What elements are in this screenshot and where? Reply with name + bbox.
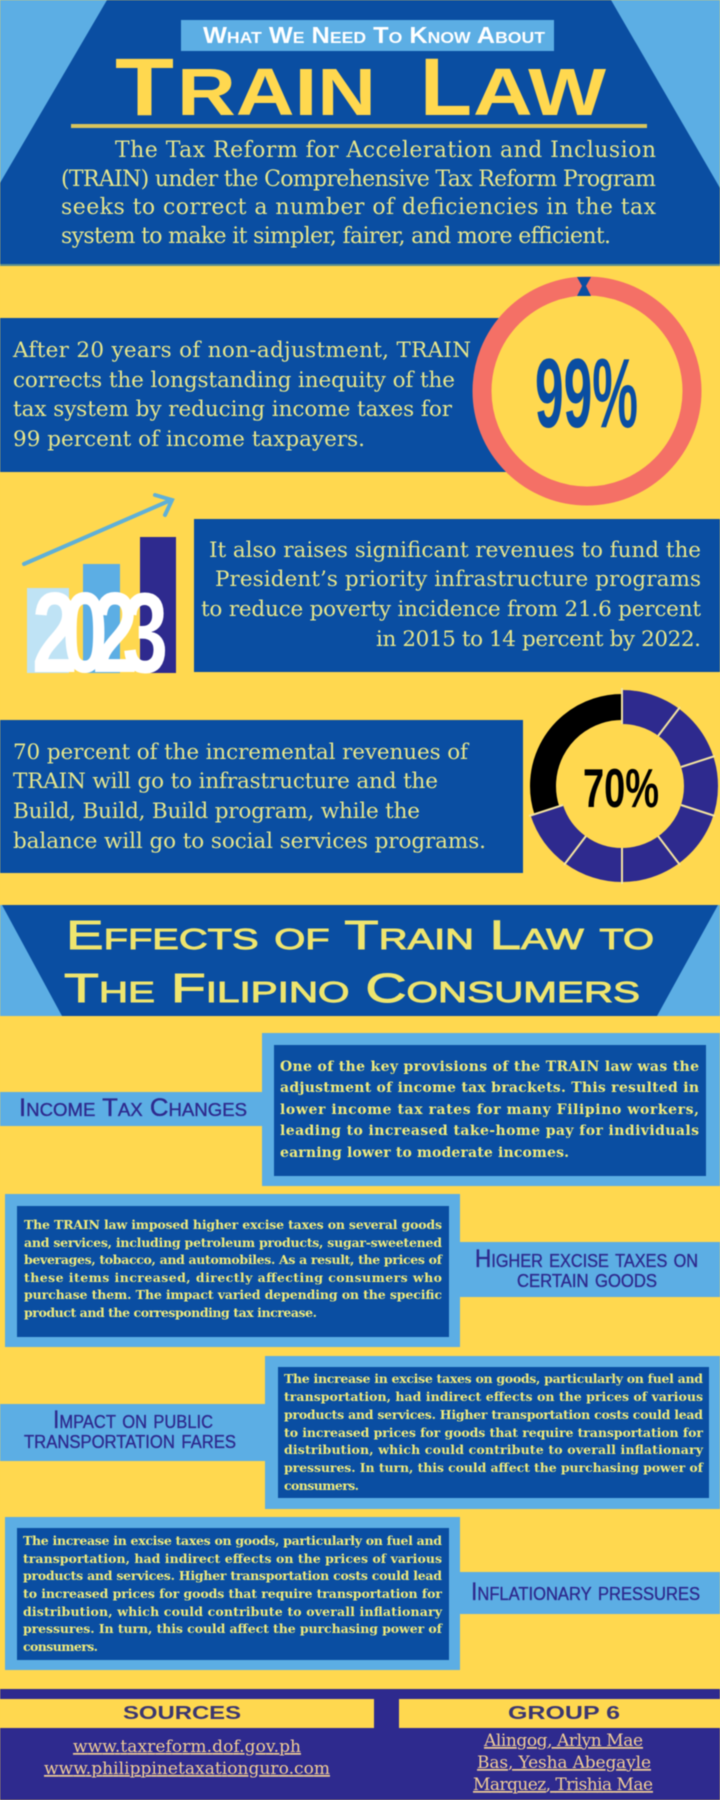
- section heading: effects: The Filipino Consumers: [64, 965, 640, 1011]
- text box: transportation, had indirect effects on the prices of various: [23, 1551, 442, 1566]
- group members: Alingog, Arlyn Mae: [483, 1731, 643, 1751]
- text box: earning lower to moderate incomes.: [280, 1145, 569, 1161]
- text box: and services, including petroleum products, sugar-sweetened: [24, 1235, 442, 1250]
- text box: One of the key provisions of the TRAIN law was the: [280, 1059, 699, 1075]
- text box: transportation, had indirect effects on the prices of various: [284, 1389, 703, 1404]
- text box: adjustment of income tax brackets. This resulted in: [280, 1080, 699, 1096]
- text box: lower income tax rates for many Filipino workers,: [280, 1102, 699, 1118]
- title: AW: [473, 55, 607, 130]
- sources: www.philippinetaxationguro.com: [44, 1759, 330, 1779]
- bars: [27, 537, 176, 673]
- intro text: (TRAIN) under the Comprehensive Tax Reform Program: [61, 167, 656, 192]
- text: 70 percent: [13, 740, 486, 854]
- text box: purchase them. The impact varied depending on the specific: [24, 1287, 442, 1302]
- text box: The increase in excise taxes on goods, particularly on fuel and: [23, 1533, 442, 1548]
- text box: to increased prices for goods that require transportation for: [23, 1586, 442, 1601]
- text box: [5, 1194, 460, 1347]
- text: income tax: [12, 338, 471, 452]
- title underline: [71, 124, 647, 128]
- label strip: [0, 1092, 264, 1126]
- label strip: Inflationary pressures: [471, 1578, 700, 1606]
- group members: [399, 1699, 720, 1795]
- text box: [262, 1033, 720, 1186]
- group members: Marquez, Trishia Mae: [473, 1775, 653, 1795]
- year: 2023: [32, 570, 168, 697]
- title: [115, 42, 607, 133]
- panel: revenues: [194, 519, 720, 672]
- text box: [5, 1517, 460, 1670]
- text: 70 percent: balance will go to social services programs.: [13, 829, 486, 854]
- text box: distribution, which could contribute to overall inflationary: [23, 1604, 443, 1619]
- intro text: system to make it simpler, fairer, and more efficient.: [61, 224, 611, 249]
- arrow: [24, 495, 172, 564]
- text box: leading to increased take-home pay for individuals: [280, 1123, 699, 1139]
- panel: 99 percent: [0, 277, 692, 496]
- text: revenues: [201, 538, 701, 652]
- text box: beverages, tobacco, and automobiles. As a result, the prices of: [24, 1252, 444, 1267]
- text box: to increased prices for goods that require transportation for: [284, 1425, 703, 1440]
- sources: www.taxreform.dof.gov.ph: [73, 1737, 301, 1757]
- label strip: certain goods: [517, 1265, 657, 1293]
- group members: Bas, Yesha Abegayle: [477, 1753, 651, 1773]
- title: T: [115, 42, 174, 133]
- sources: [0, 1699, 374, 1779]
- text box: distribution, which could contribute to overall inflationary: [284, 1442, 704, 1457]
- text: income tax: corrects the longstanding inequity of the: [13, 368, 455, 393]
- panel: inflationary pressures: [5, 1517, 720, 1670]
- intro text: The Tax Reform for Acceleration and Inclusion: [115, 138, 656, 163]
- text: income tax: 99 percent of income taxpayers.: [13, 427, 365, 452]
- panel: higher excise taxes: [5, 1194, 720, 1347]
- intro text: seeks to correct a number of deficiencies in the tax: [61, 195, 657, 220]
- label strip: Impact on public: [53, 1406, 213, 1434]
- text: revenues: President’s priority infrastructure programs: [215, 567, 701, 592]
- section heading: effects: [0, 905, 720, 1016]
- title: L: [420, 42, 472, 133]
- text box: product and the corresponding tax increase.: [24, 1305, 317, 1320]
- footer: [0, 1689, 720, 1800]
- header corner: left: [0, 0, 107, 183]
- text box: products and services. Higher transportation costs could lead: [23, 1568, 442, 1583]
- text box: pressures. In turn, this could affect the purchasing power of: [23, 1621, 444, 1636]
- label strip: transportation fares: [24, 1426, 236, 1454]
- panel: 70 percent: [0, 720, 523, 873]
- donut: 99%: [482, 277, 692, 496]
- panel: income tax changes: [0, 1033, 720, 1186]
- text box: products and services. Higher transportation costs could lead: [284, 1407, 703, 1422]
- text: revenues: to reduce poverty incidence from 21.6 percent: [201, 597, 701, 622]
- text box: The increase in excise taxes on goods, particularly on fuel and: [284, 1371, 703, 1386]
- header panel: [0, 0, 720, 266]
- label strip: [458, 1572, 720, 1614]
- section heading: effects: Effects of Train Law to: [66, 912, 654, 958]
- icon: 2023 bar chart with arrow: [24, 495, 176, 697]
- text box: pressures. In turn, this could affect the purchasing power of: [284, 1460, 705, 1475]
- text box: consumers.: [284, 1478, 359, 1493]
- text box: consumers.: [23, 1639, 98, 1654]
- stat: 70%: 70%: [583, 757, 659, 819]
- text: income tax: tax system by reducing income taxes for: [13, 397, 453, 422]
- sources: SOURCES: [123, 1703, 241, 1723]
- text: 70 percent: 70 percent of the incremental revenues of: [13, 740, 470, 765]
- group members: GROUP 6: [508, 1703, 620, 1723]
- label strip: [458, 1242, 720, 1297]
- label strip: Income Tax Changes: [19, 1094, 247, 1122]
- donut: 70%: [522, 686, 720, 886]
- label strip: Higher excise taxes on: [475, 1245, 698, 1273]
- text: 70 percent: Build, Build, Build program, while the: [13, 799, 420, 824]
- text: revenues: It also raises significant revenues to fund the: [209, 538, 701, 563]
- label strip: [0, 1404, 267, 1461]
- text box: [265, 1356, 720, 1509]
- intro text: [61, 138, 657, 249]
- panel: public transportation fares: [0, 1356, 720, 1509]
- text box: these items increased, directly affecting consumers who: [24, 1270, 442, 1285]
- text: income tax: After 20 years of non-adjustment, TRAIN: [12, 338, 471, 363]
- header corner: right: [611, 0, 720, 188]
- text box: The TRAIN law imposed higher excise taxes on several goods: [24, 1217, 442, 1232]
- subtitle: [181, 20, 554, 51]
- subtitle: What We Need To Know About: [203, 22, 545, 48]
- title: RAIN: [177, 55, 376, 130]
- text: 70 percent: TRAIN will go to infrastructure and the: [13, 769, 438, 794]
- text: revenues: in 2015 to 14 percent by 2022.: [376, 627, 701, 652]
